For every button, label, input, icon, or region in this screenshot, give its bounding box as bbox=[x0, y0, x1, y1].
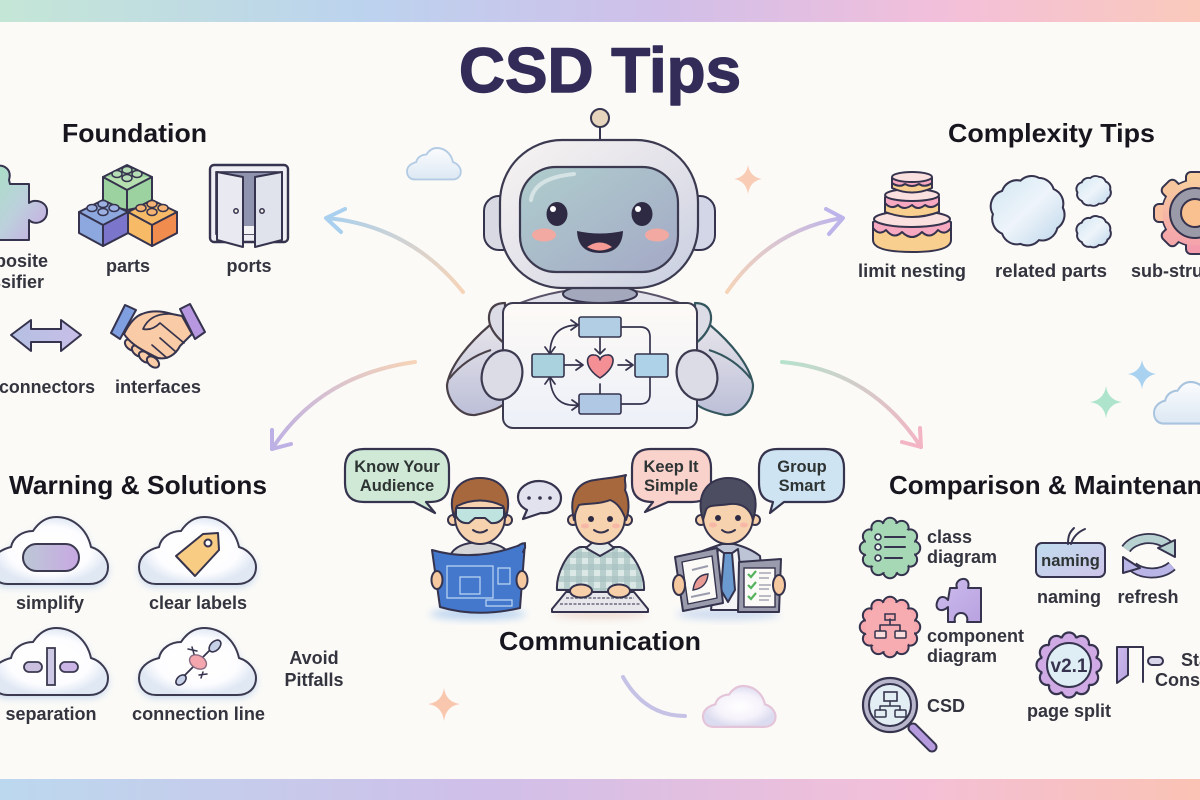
icon: class diagram badge bbox=[860, 518, 920, 578]
label: related parts: related parts bbox=[995, 261, 1107, 281]
icon: version badge v2.1 bbox=[1036, 632, 1102, 698]
robot antenna bbox=[591, 109, 609, 141]
speech bubble: Keep It Simple: Simple bbox=[644, 477, 698, 495]
label: component diagram: component bbox=[927, 626, 1024, 646]
sparkle peach bbox=[734, 165, 762, 194]
speech bubble: Know Your Audience: Know Your bbox=[354, 458, 440, 476]
heading: Foundation: Foundation bbox=[62, 118, 207, 148]
person with goggles and blueprint bbox=[432, 478, 528, 613]
decorative cloud bottom bbox=[703, 686, 776, 727]
label: interfaces: interfaces bbox=[115, 377, 201, 397]
robot ears bbox=[484, 196, 715, 250]
cloud card: separation bbox=[0, 628, 108, 698]
robot board with diagram bbox=[503, 303, 697, 428]
top gradient band bbox=[0, 0, 1200, 22]
label: component diagram bbox=[927, 626, 1024, 666]
label: Avoid Pitfalls bbox=[284, 648, 344, 690]
panel: foundation bbox=[0, 118, 288, 397]
label: connectors: connectors bbox=[0, 377, 95, 397]
label: clear labels: clear labels bbox=[149, 593, 247, 613]
speech bubble: Keep It Simple: Keep It bbox=[643, 458, 699, 476]
heading: Complexity Tips: Complexity Tips bbox=[948, 118, 1155, 148]
icon: big cloud and small clouds bbox=[991, 176, 1111, 247]
speech bubble: Know Your Audience bbox=[345, 449, 449, 513]
label: separation: separation bbox=[5, 704, 97, 724]
label: simplify: simplify bbox=[16, 593, 84, 613]
label: Stay Consistent bbox=[1155, 650, 1200, 690]
label: CSD: CSD bbox=[927, 696, 965, 716]
sparkle peach bottom bbox=[428, 688, 460, 721]
icon: refresh arrows bbox=[1123, 539, 1175, 573]
person with keyboard bbox=[552, 475, 648, 612]
icon: naming tag: naming bbox=[1041, 552, 1100, 570]
cloud card: connection line bbox=[139, 628, 256, 698]
decorative cloud top bbox=[407, 148, 461, 179]
icon: handshake bbox=[111, 304, 205, 370]
label: limit nesting: limit nesting bbox=[858, 261, 966, 281]
cloud card: simplify bbox=[0, 517, 108, 587]
label: class diagram: diagram bbox=[927, 547, 997, 567]
bottom gradient band bbox=[0, 779, 1200, 800]
decorative cloud right bbox=[1154, 382, 1200, 424]
label: class diagram bbox=[927, 527, 997, 567]
robot screen face bbox=[520, 167, 678, 272]
label: naming: naming bbox=[1037, 587, 1101, 607]
arrow: to Complexity Tips bbox=[727, 209, 843, 292]
icon: puzzle piece bbox=[0, 166, 47, 240]
robot mascot bbox=[447, 109, 753, 428]
speech bubble: Group Smart: Smart bbox=[779, 477, 826, 495]
icon: purple puzzle piece bbox=[937, 579, 981, 622]
icon: building blocks bbox=[79, 165, 177, 246]
icon: component diagram badge bbox=[860, 597, 920, 657]
panel: comparison and maintenance bbox=[860, 470, 1200, 747]
label: Avoid Pitfalls: Pitfalls bbox=[284, 670, 344, 690]
panel: warning and solutions bbox=[0, 470, 344, 724]
arrow: to Warning and Solutions bbox=[272, 362, 415, 449]
person with clipboards bbox=[673, 478, 785, 612]
label: refresh: refresh bbox=[1117, 587, 1179, 607]
icon: gear bbox=[1154, 172, 1200, 254]
label: composite classifier bbox=[0, 251, 48, 292]
icon: split page shape bbox=[1117, 647, 1163, 683]
robot head bbox=[500, 140, 698, 288]
speech bubble: ellipsis bbox=[518, 481, 561, 519]
sparkle green bbox=[1090, 386, 1122, 418]
speech bubble: Keep It Simple bbox=[632, 449, 711, 512]
label: parts: parts bbox=[106, 256, 150, 276]
robot hands bbox=[476, 346, 723, 404]
icon: naming tag bbox=[1036, 528, 1105, 577]
heading: Warning & Solutions: Warning & Solutions bbox=[9, 470, 267, 500]
label: page split: page split bbox=[1027, 701, 1111, 721]
arrow: to Comparison and Maintenance bbox=[782, 362, 921, 447]
icon: layered cake bbox=[873, 172, 951, 252]
sparkle blue bbox=[1128, 360, 1156, 389]
panel: communication bbox=[345, 449, 844, 656]
panel: complexity tips bbox=[858, 118, 1200, 281]
arrow: small lavender curve bbox=[623, 677, 685, 716]
label: component diagram: diagram bbox=[927, 646, 997, 666]
soft shadows under figures bbox=[430, 608, 780, 620]
title: CSD Tips bbox=[459, 36, 741, 106]
speech bubble: Group Smart bbox=[759, 449, 844, 513]
label: ports: ports bbox=[226, 256, 272, 276]
cloud card: clear labels bbox=[139, 517, 256, 587]
robot body and arms bbox=[447, 285, 753, 415]
icon: version badge v2.1: v2.1 bbox=[1051, 656, 1088, 677]
heading: Communication: Communication bbox=[499, 626, 701, 656]
speech bubble: Know Your Audience: Audience bbox=[360, 477, 434, 495]
speech bubble: Group Smart: Group bbox=[777, 458, 827, 476]
icon: double doors bbox=[210, 165, 288, 247]
label: Avoid Pitfalls: Avoid bbox=[289, 648, 339, 668]
icon: magnifier over diagram bbox=[863, 678, 932, 747]
label: class diagram: class bbox=[927, 527, 972, 547]
label: connection line: connection line bbox=[132, 704, 265, 724]
icon: double arrow connector bbox=[11, 320, 81, 351]
arrow: to Foundation bbox=[326, 209, 463, 292]
